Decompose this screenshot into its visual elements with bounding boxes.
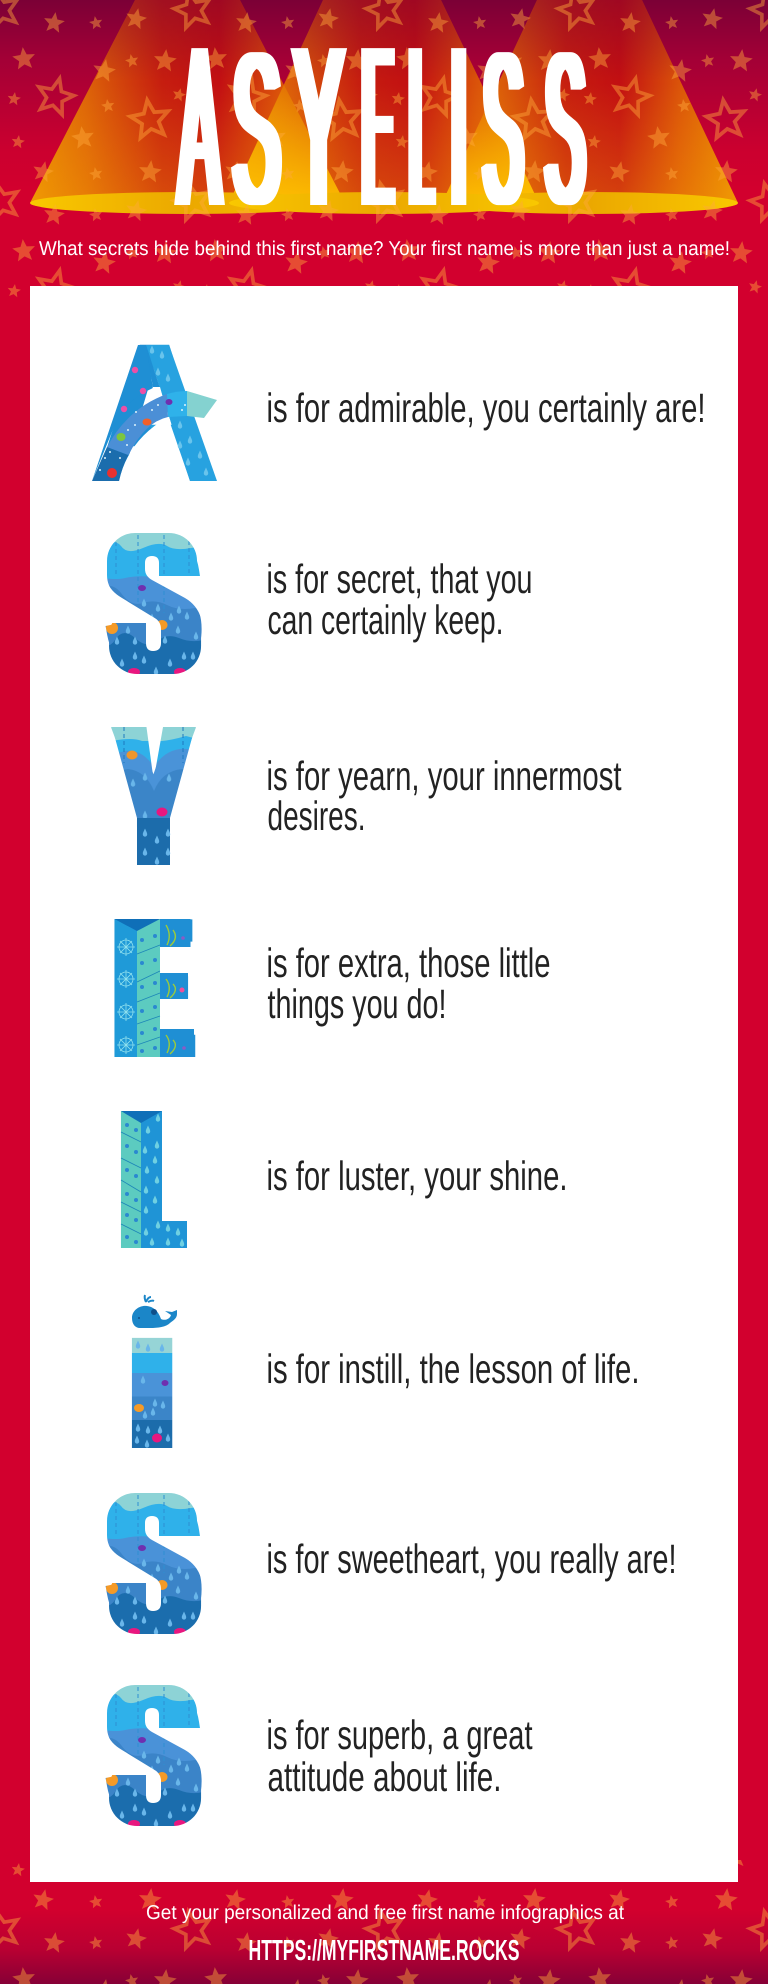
title: I (451, 0, 466, 254)
icon: letter I: I (113, 1303, 191, 1482)
text: S third lines: is for superb, a great (266, 1712, 533, 1758)
panel: white card (30, 286, 738, 1882)
text: E lines: is for extra, those little (266, 940, 550, 986)
text: S third lines: attitude about life. (268, 1754, 502, 1800)
text: Y lines (266, 753, 622, 839)
text: S lines: is for secret, that you (266, 556, 532, 602)
row: letter I (113, 1295, 640, 1482)
row: letter Y (112, 693, 622, 898)
icon: letter L: L (113, 1069, 190, 1291)
icon: letter S second: S (109, 1466, 201, 1662)
text: S third lines (266, 1712, 533, 1800)
icon: letter A: A (92, 302, 217, 523)
text: Y lines: is for yearn, your innermost (266, 753, 622, 799)
title: Y (294, 0, 344, 254)
star pattern top (0, 0, 768, 300)
icon: letter Y: Y (116, 693, 191, 898)
title: A (179, 0, 220, 254)
text: E lines (266, 940, 550, 1027)
row: letter S second (97, 1466, 676, 1662)
text: L line: is for luster, your shine. (266, 1153, 568, 1199)
footer url: HTTPS://MYFIRSTNAME.ROCKS (248, 1935, 520, 1967)
text: Y lines: desires. (268, 793, 366, 839)
row: letter A (92, 302, 706, 523)
text: S lines (266, 556, 532, 643)
text: S lines: can certainly keep. (268, 597, 504, 643)
icon: letter S: S (109, 506, 201, 702)
star pattern bottom (0, 1860, 768, 1984)
title: S (483, 7, 523, 249)
title: L (410, 0, 433, 254)
row: letter L (113, 1069, 568, 1291)
title: E (362, 0, 393, 254)
title (179, 0, 585, 254)
subtitle: What secrets hide behind this first name? Your first name is more than just a name! (39, 238, 730, 260)
spotlights (30, 0, 738, 214)
icon: letter S third: S (109, 1658, 201, 1854)
row: letter E (105, 877, 550, 1100)
icon: whale (132, 1295, 177, 1328)
icon: letter E: E (105, 877, 201, 1100)
footer text: Get your personalized and free first name infographics at (146, 1902, 624, 1924)
row: letter S (97, 506, 532, 702)
title: S (545, 7, 585, 249)
text: E lines: things you do! (268, 981, 446, 1027)
title: S (233, 7, 280, 249)
row: letter S third (97, 1658, 533, 1854)
